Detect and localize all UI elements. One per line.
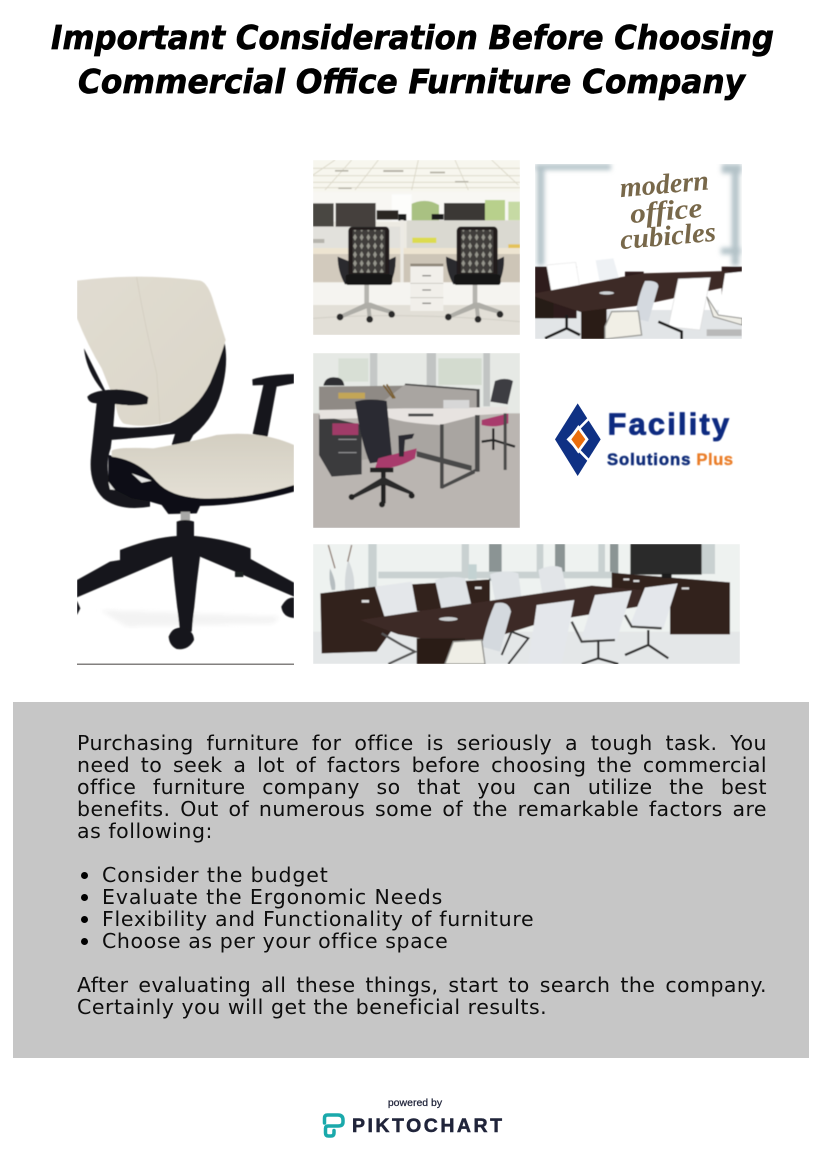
ceiling <box>313 160 520 193</box>
caption: modern office cubicles: cubicles <box>619 217 717 256</box>
icon: Piktochart mark <box>324 1115 343 1136</box>
text block: introduction <box>77 731 767 843</box>
partition <box>319 386 405 410</box>
bullet list: factors: Consider the budget <box>102 863 329 887</box>
seat <box>112 434 294 498</box>
text block: conclusion <box>77 973 767 1019</box>
seat underside <box>108 455 294 514</box>
floor <box>535 310 742 339</box>
footer: powered by Piktochart: PIKTOCHART <box>352 1115 502 1137</box>
logo wordmark: Plus <box>696 450 733 469</box>
text block: introduction: office furniture company so that you can utilize the best <box>77 775 767 799</box>
casters <box>169 627 194 649</box>
vases <box>329 568 335 590</box>
image: office chair <box>77 276 294 665</box>
credenzas <box>320 579 490 653</box>
window frames <box>535 164 742 266</box>
backrest <box>77 277 226 426</box>
table <box>535 271 728 312</box>
image: modern office cubicles conference room <box>535 164 742 339</box>
window mullions <box>368 544 715 587</box>
bullet list: factors <box>81 863 534 953</box>
caption: modern office cubicles <box>620 173 715 249</box>
title: Commercial Office Furniture Company <box>78 62 746 101</box>
logo wordmark: Facility <box>608 407 729 441</box>
table <box>360 586 642 647</box>
image: cubicle workstation with two mesh chairs <box>313 160 520 335</box>
bullet list: factors: Choose as per your office space <box>102 929 448 953</box>
logo wordmark <box>607 407 733 469</box>
carpet <box>313 413 520 528</box>
partitions <box>313 227 400 248</box>
footer: powered by Piktochart <box>322 1097 502 1138</box>
text block: introduction: benefits. Out of numerous some of the remarkable factors are <box>77 797 767 821</box>
left armrest and post <box>87 389 150 508</box>
back chairs <box>547 262 580 292</box>
text block: conclusion: After evaluating all these things, start to search the company. <box>77 973 767 997</box>
front chair <box>355 399 392 463</box>
drawer pedestal <box>410 264 443 311</box>
logo diamond mark <box>555 403 601 476</box>
text block: introduction: Purchasing furniture for office is seriously a tough task. You <box>77 731 767 755</box>
right armrest <box>252 374 294 437</box>
image: open workstation with pink chairs <box>313 353 520 528</box>
front chairs <box>482 603 511 652</box>
caption: modern office cubicles: modern <box>618 165 710 204</box>
star base <box>77 536 294 632</box>
credenza <box>535 267 577 318</box>
window wall <box>313 192 520 222</box>
floor <box>313 632 740 664</box>
panel: text on grey background <box>13 702 809 1058</box>
logo: Facility Solutions Plus <box>555 403 734 476</box>
text block: introduction: as following: <box>77 819 213 843</box>
back chairs <box>323 377 344 386</box>
desks <box>313 248 400 254</box>
bullet list: factors: Evaluate the Ergonomic Needs <box>102 885 443 909</box>
title: Important Consideration Before Choosing <box>51 18 774 57</box>
title <box>51 18 774 101</box>
desk surface <box>320 407 508 425</box>
text block: introduction: need to seek a lot of factors before choosing the commercial <box>77 753 767 777</box>
image: conference room panorama <box>313 544 740 664</box>
black frame behind backrest <box>84 342 226 445</box>
monitors <box>313 203 334 227</box>
caption: modern office cubicles: office <box>629 193 704 230</box>
text block: conclusion: Certainly you will get the beneficial results. <box>77 995 547 1019</box>
lower area and floor <box>313 282 520 306</box>
front chairs <box>635 281 658 322</box>
bullet list: factors: Flexibility and Functionality of furniture <box>102 907 534 931</box>
footer: powered by Piktochart: powered by <box>388 1097 443 1109</box>
baseline rule <box>77 664 294 665</box>
gas cylinder <box>181 512 190 522</box>
drawer cabinet <box>319 415 362 477</box>
chairs <box>337 227 396 323</box>
logo wordmark: Solutions <box>607 450 690 469</box>
back chairs <box>375 582 418 618</box>
television <box>630 544 702 575</box>
